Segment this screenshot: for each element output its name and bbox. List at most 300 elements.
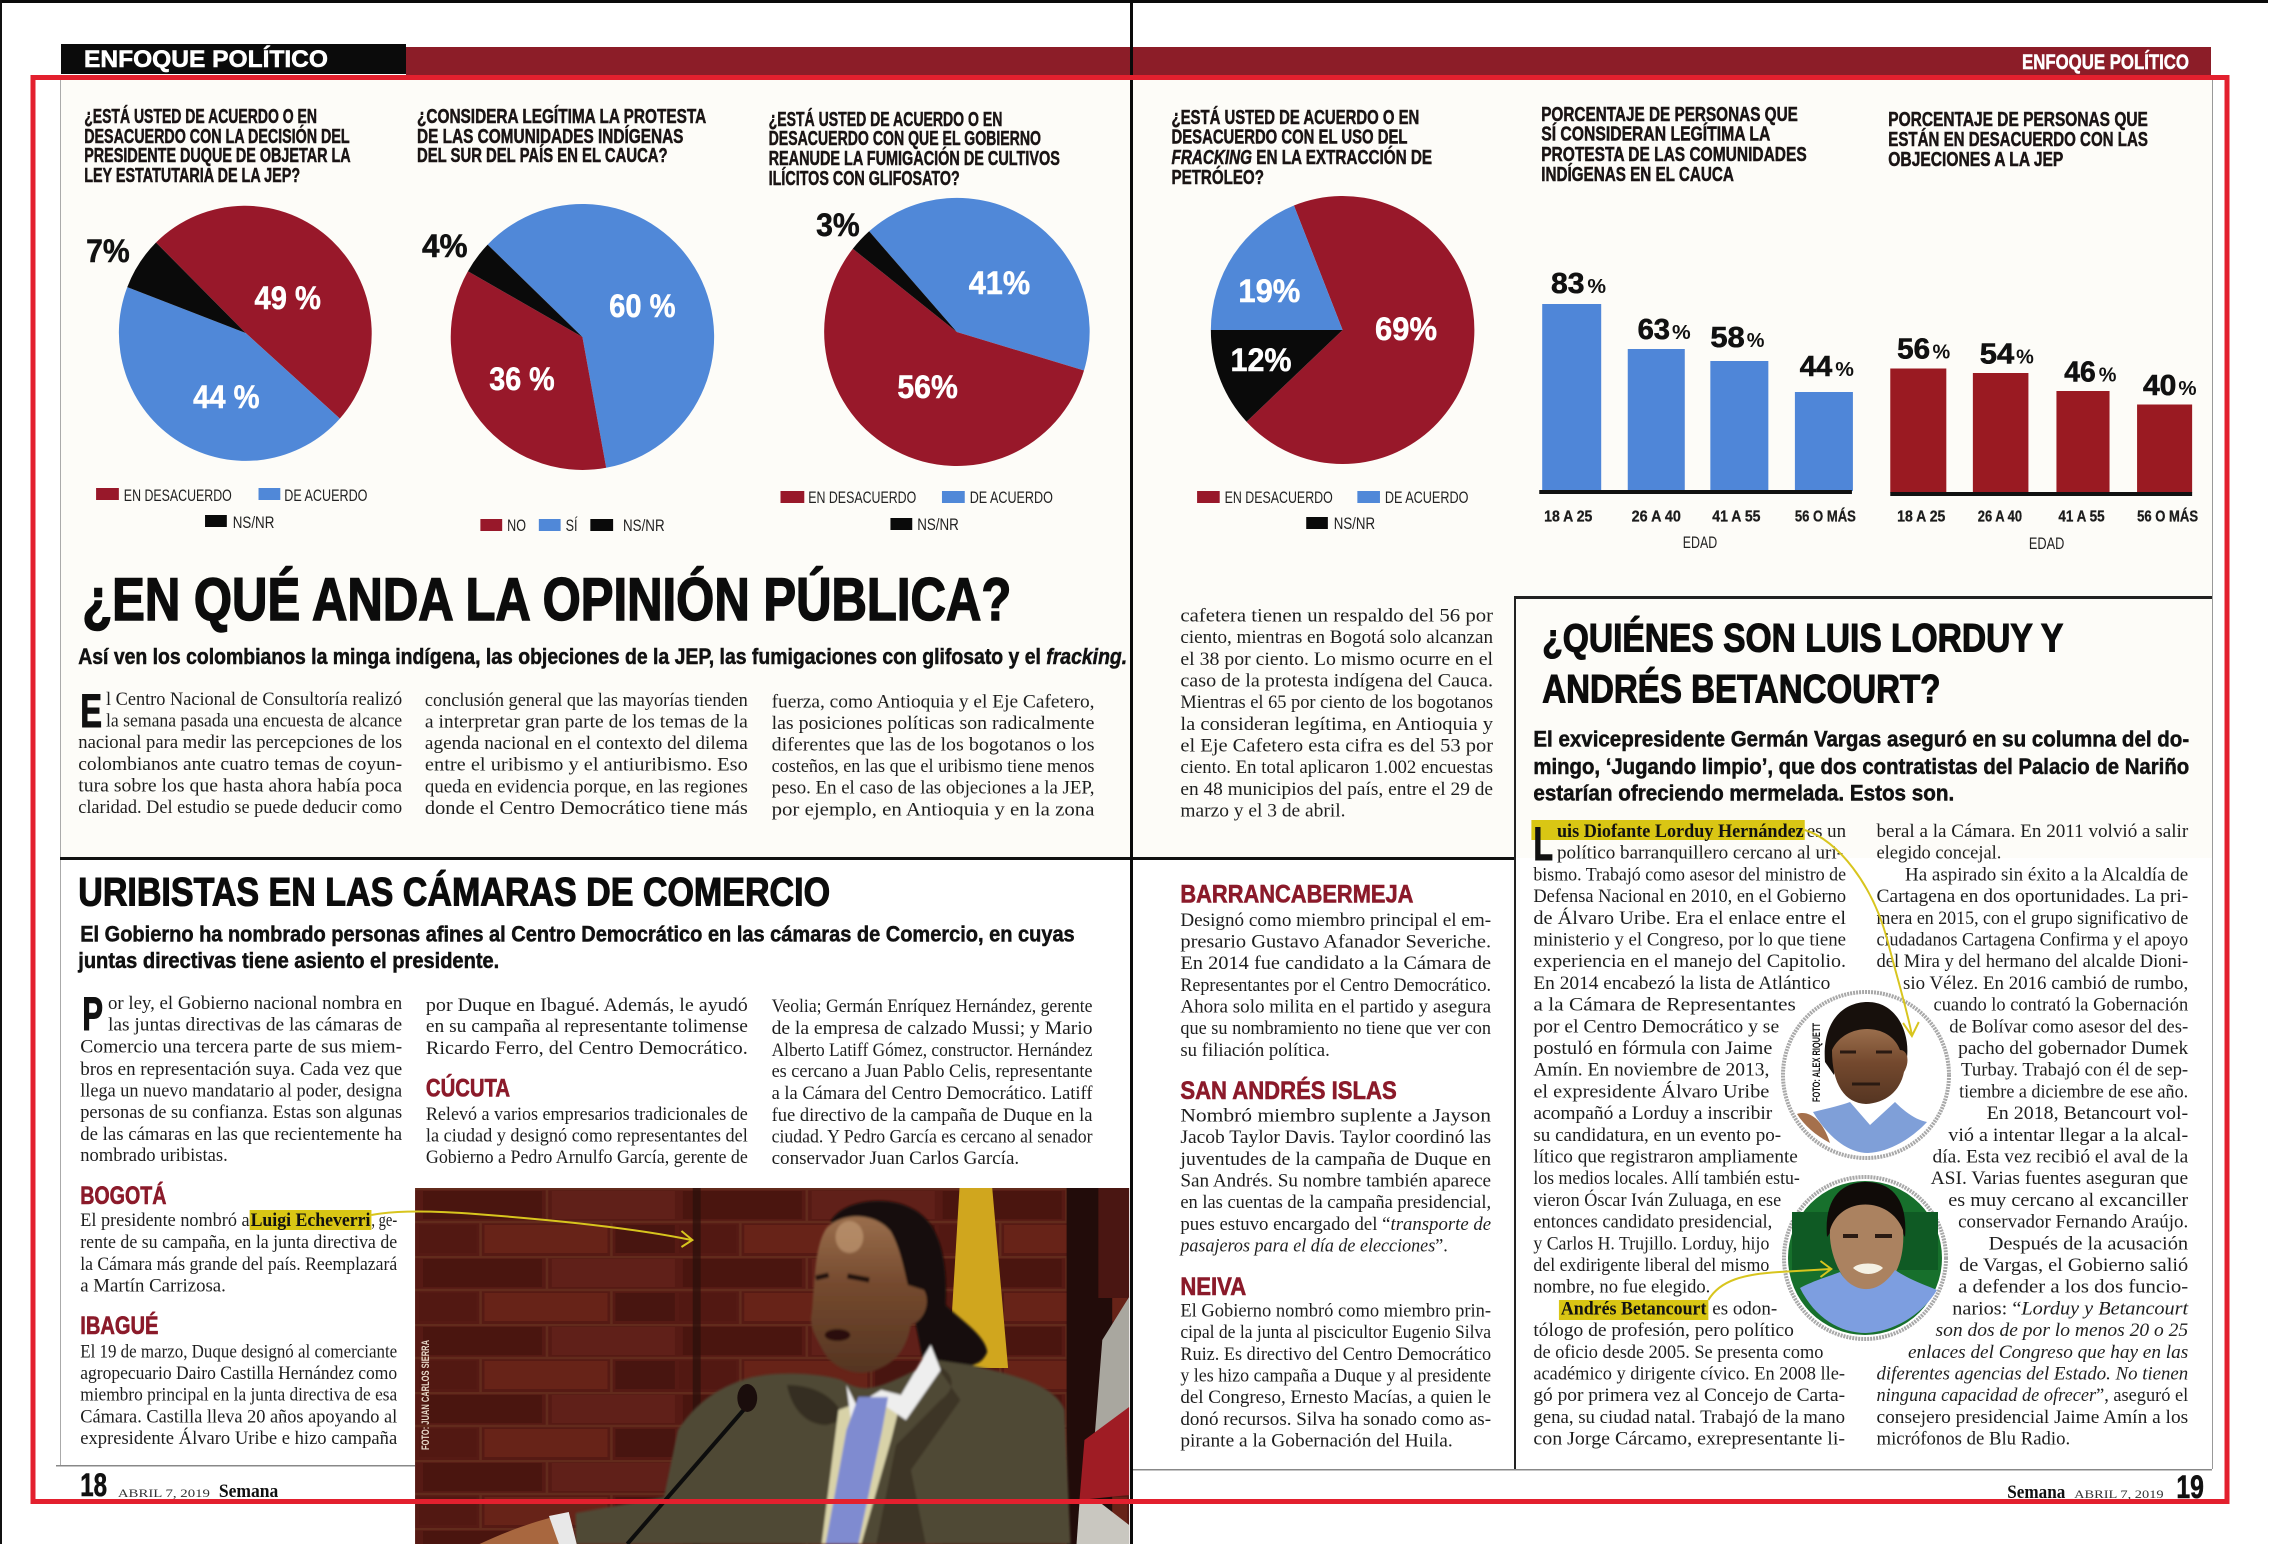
footer: page 19: Semana bbox=[2007, 1482, 2066, 1503]
text block: Betancourt profile column: de Vargas, el Gobierno salió bbox=[1959, 1255, 2188, 1276]
section: Bogotá: El presidente nombró a bbox=[80, 1210, 250, 1231]
text block: opinion article column 3 bbox=[772, 691, 1095, 821]
title: who are Lorduy and Betancourt bbox=[1542, 616, 2063, 712]
text block: Lorduy profile column: del exdirigente liberal del mismo bbox=[1533, 1255, 1769, 1276]
text block: Lorduy profile column: Amín. En noviembre de 2013, bbox=[1533, 1060, 1769, 1081]
section: San Andrés Islas: en las cuentas de la campaña presidencial, bbox=[1180, 1192, 1491, 1213]
text block: Betancourt profile column: enlaces del Congreso que hay en las bbox=[1908, 1342, 2188, 1363]
legend: EN DESACUERDO bbox=[124, 486, 232, 505]
text block: Betancourt profile column: mera en 2015, con el grupo significativo de bbox=[1877, 908, 2188, 929]
legend: EN DESACUERDO bbox=[808, 488, 916, 507]
legend: DE ACUERDO bbox=[970, 488, 1053, 507]
section: Neiva bbox=[1180, 1274, 1492, 1452]
text block: Lorduy profile column: político barranquillero cercano al uri- bbox=[1557, 843, 1843, 864]
pie: 3% bbox=[816, 207, 860, 243]
age axis: 26 A 40 bbox=[1978, 508, 2022, 526]
section: Neiva: El Gobierno nombró como miembro prin- bbox=[1180, 1301, 1491, 1322]
question text: DESACUERDO CON EL USO DEL bbox=[1172, 126, 1407, 149]
legend: DE ACUERDO bbox=[1385, 488, 1468, 507]
panel: pie chart JEP decision bbox=[84, 105, 372, 532]
text block: chambers article column 3: fue directivo de la campaña de Duque en la bbox=[772, 1105, 1093, 1126]
text block: Betancourt profile column: día. Esta vez recibió el aval de la bbox=[1933, 1146, 2189, 1168]
section: Barrancabermeja: Ahora solo milita en el partido y asegura bbox=[1180, 997, 1492, 1018]
text block: opinion article column 3: fuerza, como Antioquia y el Eje Cafetero, bbox=[772, 691, 1095, 713]
text block: chambers article column 3: es cercano a Juan Pablo Celis, representante bbox=[772, 1061, 1093, 1082]
age axis: 56 O MÁS bbox=[2137, 506, 2198, 526]
section: Neiva: cipal de la junta al piscicultor Eugenio Silva bbox=[1180, 1322, 1492, 1343]
text block: chambers article intro bbox=[80, 988, 403, 1166]
text block: opinion article column 2: conclusión general que las mayorías tienden bbox=[425, 690, 748, 711]
section: Ibagué: expresidente Álvaro Uribe e hizo campaña bbox=[80, 1427, 398, 1449]
question text bbox=[84, 105, 351, 187]
text block: opinion article column 3: las posiciones políticas son radicalmente bbox=[772, 713, 1095, 734]
section: Bogotá: rente de su campaña, en la junta directiva de bbox=[80, 1232, 397, 1253]
age axis: EDAD bbox=[2029, 534, 2064, 553]
title: main headline: ¿EN QUÉ ANDA LA OPINIÓN PÚBLICA? bbox=[82, 566, 1011, 633]
section: Ibagué: agropecuario Dairo Castilla Hernández como bbox=[80, 1363, 397, 1384]
question text: OBJECIONES A LA JEP bbox=[1888, 149, 2063, 171]
portrait: Luis Lorduy bbox=[1783, 992, 1949, 1158]
text block: Lorduy profile column: nombre, no fue elegido. bbox=[1533, 1277, 1710, 1298]
panel: bar chart JEP objections by age bbox=[1888, 109, 2198, 553]
question text: PORCENTAJE DE PERSONAS QUE bbox=[1888, 109, 2148, 131]
subtitle: Lorduy and Betancourt deck: El exvicepresidente Germán Vargas aseguró en su columna del do- bbox=[1533, 727, 2189, 752]
text block: Lorduy profile column: tólogo de profesión, pero político bbox=[1533, 1320, 1794, 1341]
text block: Betancourt profile column: cuando lo contrató la Gobernación bbox=[1934, 994, 2189, 1016]
panel: bar chart protest by age bbox=[1539, 104, 1856, 552]
text block: chambers article column 2 top: en su campaña al representante tolimense bbox=[426, 1016, 748, 1037]
section: Neiva: NEIVA bbox=[1180, 1274, 1246, 1301]
legend: EN DESACUERDO bbox=[1225, 488, 1333, 507]
text block: chambers article intro: P bbox=[82, 988, 103, 1040]
pie: 4% bbox=[422, 228, 468, 264]
question text: LEY ESTATUTARIA DE LA JEP? bbox=[84, 165, 300, 187]
title: who are Lorduy and Betancourt: ¿QUIÉNES SON LUIS LORDUY Y bbox=[1542, 616, 2063, 661]
text block: Lorduy profile column: gena, su ciudad natal. Trabajó de la mano bbox=[1533, 1407, 1845, 1428]
legend: NS/NR bbox=[233, 513, 274, 532]
text block: opinion article column 1: tura sobre los que hasta ahora había poca bbox=[78, 776, 403, 797]
age axis: 26 A 40 bbox=[1632, 508, 1681, 526]
question text: SÍ CONSIDERAN LEGÍTIMA LA bbox=[1541, 122, 1770, 146]
text block: opinion article column 3: costeños, en las que el uribismo tiene menos bbox=[772, 756, 1095, 777]
section: San Andrés Islas bbox=[1178, 1077, 1492, 1257]
section: Ibagué: El 19 de marzo, Duque designó al comerciante bbox=[80, 1342, 397, 1363]
bars bbox=[1890, 368, 2192, 496]
text block: opinion article column 1: la semana pasada una encuesta de alcance bbox=[106, 711, 402, 732]
text block: Betancourt profile column: del Mira y del hermano del alcalde Dioni- bbox=[1877, 951, 2188, 972]
bar values: % bbox=[2099, 364, 2117, 387]
footer: page 19: ABRIL 7, 2019 bbox=[2074, 1487, 2164, 1501]
legend bbox=[1197, 488, 1468, 533]
bar values: 54 bbox=[1980, 338, 2014, 371]
pie: 19% bbox=[1238, 273, 1300, 309]
text block: opinion article column 1: claridad. Del estudio se puede deducir como bbox=[78, 797, 402, 818]
title: who are Lorduy and Betancourt: ANDRÉS BETANCOURT? bbox=[1542, 667, 1940, 712]
text block: chambers article column 3: Veolia; Germán Enríquez Hernández, gerente bbox=[772, 996, 1093, 1017]
text block: Lorduy profile column: su candidatura, en un evento po- bbox=[1533, 1125, 1781, 1146]
text block: Betancourt profile column: consejero presidencial Jaime Amín a los bbox=[1877, 1407, 2188, 1428]
pie: 44 % bbox=[193, 379, 260, 415]
bar values: % bbox=[2178, 378, 2197, 400]
text block: chambers article column 3: de la empresa de calzado Mussi; y Mario bbox=[772, 1018, 1093, 1039]
text block: chambers article column 2 top: Ricardo Ferro, del Centro Democrático. bbox=[426, 1038, 748, 1059]
subtitle: chambers of commerce deck: juntas directivas tiene asiento el presidente. bbox=[77, 948, 499, 973]
arrow: Betancourt name to portrait bbox=[1708, 1261, 1831, 1300]
question text: ¿ESTÁ USTED DE ACUERDO O EN bbox=[769, 108, 1002, 131]
footer: page 18: Semana bbox=[219, 1481, 279, 1502]
bar values: % bbox=[1672, 322, 1691, 344]
question text: FRACKING EN LA EXTRACCIÓN DE bbox=[1172, 145, 1432, 169]
question text: PROTESTA DE LAS COMUNIDADES bbox=[1541, 144, 1807, 166]
question text: ESTÁN EN DESACUERDO CON LAS bbox=[1888, 128, 2148, 151]
question text bbox=[1888, 109, 2148, 171]
section: San Andrés Islas: juventudes de la campaña de Duque en bbox=[1179, 1149, 1492, 1170]
section: Bogotá: a Martín Carrizosa. bbox=[80, 1276, 226, 1297]
text block: Betancourt profile column: ciudadanos Cartagena Confirma y el apoyo bbox=[1877, 929, 2188, 951]
section: Ibagué bbox=[80, 1311, 398, 1449]
footer: page 18: 18 bbox=[80, 1467, 107, 1503]
highlight: Luigi Echeverri bbox=[250, 1210, 371, 1230]
text block: Betancourt profile column: de Bolívar como asesor del des- bbox=[1949, 1016, 2188, 1037]
center fold line bbox=[1130, 0, 1133, 1544]
text block: Betancourt profile column: En 2018, Betancourt vol- bbox=[1987, 1103, 2188, 1124]
text block: chambers article intro: personas de su confianza. Estas son algunas bbox=[80, 1102, 402, 1123]
photo: Luigi Echeverri speaking at microphone bbox=[415, 1188, 1129, 1544]
section: San Andrés Islas: Nombró miembro suplente a Jayson bbox=[1180, 1106, 1492, 1127]
text block: chambers article intro: or ley, el Gobierno nacional nombra en bbox=[108, 993, 403, 1014]
text block: opinion article column 4: ciento. En total aplicaron 1.002 encuestas bbox=[1180, 757, 1493, 778]
question text: DE LAS COMUNIDADES INDÍGENAS bbox=[417, 125, 683, 148]
text block: Betancourt profile column: vió a intentar llegar a la alcal- bbox=[1948, 1125, 2188, 1146]
pie: 60 % bbox=[609, 288, 676, 324]
bar values: % bbox=[1933, 341, 1951, 364]
section: Ibagué: miembro principal en la junta directiva de esa bbox=[80, 1385, 398, 1406]
section: Neiva: y les hizo campaña a Duque y al presidente bbox=[1180, 1366, 1491, 1387]
question text: REANUDE LA FUMIGACIÓN DE CULTIVOS bbox=[769, 146, 1060, 170]
text block: Lorduy profile column: académico y dirigente cívico. En 2008 lle- bbox=[1533, 1363, 1845, 1385]
text block: Lorduy profile column: Defensa Nacional en 2010, en el Gobierno bbox=[1533, 886, 1846, 907]
question text bbox=[1172, 106, 1432, 189]
question text: DESACUERDO CON QUE EL GOBIERNO bbox=[769, 128, 1041, 150]
portrait: Luis Lorduy: FOTO: ALEX RIQUETT bbox=[1811, 1023, 1823, 1102]
question text bbox=[417, 105, 706, 167]
text block: chambers article column 3: conservador Juan Carlos García. bbox=[772, 1148, 1019, 1169]
text block: Betancourt profile column: Turbay. Trabajó con él de sep- bbox=[1961, 1060, 2188, 1081]
panel: pie chart glyphosate bbox=[769, 108, 1090, 534]
highlight: Andrés Betancourt bbox=[1559, 1300, 1708, 1320]
section header bar: ENFOQUE POLÍTICO bbox=[84, 45, 328, 73]
text block: opinion article column 4 bbox=[1180, 606, 1494, 822]
text block: Betancourt profile column: pacho del gobernador Dumek bbox=[1958, 1038, 2189, 1059]
arrow: Luigi Echeverri to photo bbox=[371, 1212, 692, 1247]
subtitle: main deck: Así ven los colombianos la minga indígena, las objeciones de la JEP, las fumigaciones con glifosato y el fracking. bbox=[78, 644, 1127, 669]
bar values: 44 bbox=[1800, 351, 1832, 383]
question text: PETRÓLEO? bbox=[1172, 165, 1264, 189]
section: Ibagué: IBAGUÉ bbox=[80, 1311, 158, 1340]
text block: opinion article column 4: cafetera tienen un respaldo del 56 por bbox=[1180, 606, 1494, 627]
panel: pie chart fracking bbox=[1172, 106, 1474, 533]
text block: Lorduy profile column: acompañó a Lorduy a inscribir bbox=[1533, 1103, 1773, 1124]
text block: Lorduy profile column: uis Diofante Lorduy Hernández bbox=[1557, 821, 1804, 842]
question text: PORCENTAJE DE PERSONAS QUE bbox=[1541, 104, 1798, 126]
text block: Betancourt profile column: tiembre a diciembre de ese año. bbox=[1959, 1081, 2188, 1102]
text block: Lorduy profile column: postuló en fórmula con Jaime bbox=[1533, 1038, 1772, 1059]
section: Bogotá bbox=[80, 1181, 398, 1297]
text block: chambers article column 2 top: por Duque en Ibagué. Además, le ayudó bbox=[426, 995, 748, 1016]
text block: Betancourt profile column: Cartagena en dos oportunidades. La pri- bbox=[1877, 886, 2188, 907]
section: Neiva: Ruiz. Es directivo del Centro Democrático bbox=[1180, 1344, 1491, 1365]
age axis: 18 A 25 bbox=[1897, 508, 1945, 526]
pie bbox=[422, 204, 714, 470]
legend: SÍ bbox=[566, 516, 578, 535]
question text: DESACUERDO CON LA DECISIÓN DEL bbox=[84, 124, 350, 148]
footer: page 18: ABRIL 7, 2019 bbox=[118, 1486, 210, 1500]
legend bbox=[96, 486, 367, 532]
text block: Lorduy profile column: el expresidente Álvaro Uribe bbox=[1533, 1080, 1769, 1102]
age axis: 56 O MÁS bbox=[1795, 506, 1856, 526]
section header bar bbox=[61, 44, 2211, 75]
bar values: % bbox=[1747, 330, 1765, 352]
pie: 7% bbox=[86, 233, 130, 269]
question text: DEL SUR DEL PAÍS EN EL CAUCA? bbox=[417, 144, 668, 167]
text block: Lorduy profile column: entonces candidato presidencial, bbox=[1533, 1211, 1772, 1233]
text block: Betancourt profile column: es muy cercano al excanciller bbox=[1948, 1190, 2189, 1211]
arrow: Lorduy name to portrait bbox=[1805, 830, 1919, 1036]
text block: Betancourt profile column: conservador Fernando Araújo. bbox=[1958, 1211, 2188, 1233]
text block: opinion article column 4: marzo y el 3 de abril. bbox=[1180, 801, 1346, 822]
pie: 36 % bbox=[489, 361, 555, 397]
section: Bogotá: la Cámara más grande del país. Reemplazará bbox=[80, 1254, 398, 1275]
text block: opinion article column 3: diferentes que las de los bogotanos o los bbox=[772, 735, 1095, 756]
text block: opinion article column 2: queda en evidencia porque, en las regiones bbox=[425, 776, 748, 798]
section: San Andrés Islas: Jacob Taylor Davis. Taylor coordinó las bbox=[1180, 1127, 1491, 1148]
text block: opinion article column 4: el 38 por ciento. Lo mismo ocurre en el bbox=[1180, 649, 1493, 670]
text block: chambers article column 3: Alberto Latiff Gómez, constructor. Hernández bbox=[772, 1040, 1093, 1061]
text block: Betancourt profile column: narios: “ Lorduy y Betancourt bbox=[1952, 1298, 2189, 1319]
man bbox=[576, 1201, 1071, 1544]
subtitle: Lorduy and Betancourt deck: estarían ofreciendo mermelada. Estos son. bbox=[1533, 781, 1954, 806]
portrait: Andrés Betancourt bbox=[1784, 1177, 1946, 1339]
section: Bogotá: BOGOTÁ bbox=[80, 1181, 166, 1210]
pie bbox=[86, 206, 372, 461]
text block: Lorduy profile column: gó por primera vez al Concejo de Carta- bbox=[1533, 1385, 1845, 1406]
text block: Betancourt profile column: Después de la acusación bbox=[1989, 1233, 2189, 1254]
text block: opinion article column 2: a interpretar gran parte de los temas de la bbox=[425, 712, 748, 733]
text block: Betancourt profile column: elegido concejal. bbox=[1877, 843, 2001, 864]
text block: opinion article column 4: el Eje Cafetero esta cifra es del 53 por bbox=[1180, 736, 1494, 757]
photo credit: FOTO: JUAN CARLOS SIERRA bbox=[420, 1340, 432, 1450]
text block: Lorduy profile column: bismo. Trabajó como asesor del ministro de bbox=[1533, 864, 1846, 885]
highlight: Luis Diofante Lorduy Hernández bbox=[1531, 820, 1805, 840]
section header bar: ENFOQUE POLÍTICO bbox=[2022, 51, 2189, 74]
text block: Lorduy profile column: Andrés Betancourt bbox=[1561, 1298, 1707, 1319]
section: Cúcuta: Relevó a varios empresarios tradicionales de bbox=[426, 1104, 748, 1125]
text block: Lorduy profile column: es odon- bbox=[1712, 1298, 1777, 1319]
section: Cúcuta bbox=[426, 1073, 748, 1168]
pie bbox=[1211, 196, 1474, 464]
text block: Lorduy profile column: a la Cámara de Representantes bbox=[1533, 994, 1796, 1016]
text block: opinion article column 1: l Centro Nacional de Consultoría realizó bbox=[106, 689, 402, 710]
text block: opinion article column 3: peso. En el caso de las objeciones a la JEP, bbox=[772, 778, 1095, 799]
text block: Lorduy profile column: experiencia en el manejo del Capitolio. bbox=[1533, 951, 1846, 972]
text block: opinion article column 2: donde el Centro Democrático tiene más bbox=[425, 798, 748, 819]
bar values: % bbox=[2016, 346, 2034, 369]
text block: Lorduy profile column: es un bbox=[1807, 821, 1847, 842]
legend bbox=[781, 488, 1053, 534]
panel: pie chart indigenous protest bbox=[417, 105, 714, 535]
text block: Betancourt profile column: ASI. Varias fuentes aseguran que bbox=[1931, 1168, 2188, 1189]
text block: Betancourt profile column: son dos de por lo menos 20 o 25 bbox=[1936, 1320, 2188, 1341]
section: Cúcuta: Gobierno a Pedro Arnulfo García, gerente de bbox=[426, 1147, 748, 1168]
text block: chambers article column 3 bbox=[772, 996, 1093, 1169]
text block: chambers article intro: de las cámaras en las que recientemente ha bbox=[80, 1124, 403, 1145]
right page content bbox=[1172, 104, 2204, 1505]
text block: chambers article column 2 top bbox=[426, 995, 748, 1059]
footer: page 19: 19 bbox=[2176, 1469, 2204, 1505]
question text bbox=[1541, 104, 1807, 186]
title: chambers of commerce: URIBISTAS EN LAS CÁMARAS DE COMERCIO bbox=[78, 870, 830, 915]
pie: 56% bbox=[897, 369, 958, 405]
question text: ¿CONSIDERA LEGÍTIMA LA PROTESTA bbox=[417, 105, 706, 128]
text block: chambers article intro: bros en representación suya. Cada vez que bbox=[80, 1059, 402, 1080]
text block: Lorduy profile column: ministerio y el Congreso, por lo que tiene bbox=[1533, 929, 1846, 951]
legend: NS/NR bbox=[917, 515, 959, 534]
section: Neiva: donó recursos. Silva ha sonado como as- bbox=[1180, 1409, 1491, 1430]
text block: Lorduy profile column: L bbox=[1533, 818, 1553, 870]
bar values: 40 bbox=[2143, 370, 2176, 402]
bar values: % bbox=[1835, 359, 1854, 381]
text block: Betancourt profile column: Ha aspirado sin éxito a la Alcaldía de bbox=[1905, 864, 2188, 885]
section: Bogotá: , ge- bbox=[371, 1210, 397, 1231]
question text bbox=[769, 108, 1060, 190]
pie: 41% bbox=[969, 265, 1030, 301]
text block: opinion article column 1: E bbox=[80, 685, 102, 737]
section: Cúcuta: CÚCUTA bbox=[426, 1073, 510, 1103]
section: Cúcuta: la ciudad y designó como representantes del bbox=[426, 1126, 748, 1147]
section: Barrancabermeja: BARRANCABERMEJA bbox=[1180, 882, 1413, 909]
legend: NO bbox=[507, 516, 526, 535]
section: Bogotá: Luigi Echeverri bbox=[251, 1210, 370, 1231]
footer: page 18 bbox=[80, 1467, 279, 1503]
legend: NS/NR bbox=[623, 516, 665, 535]
age axis bbox=[1544, 506, 1856, 552]
bar values bbox=[1897, 333, 2197, 402]
question text: INDÍGENAS EN EL CAUCA bbox=[1541, 163, 1734, 186]
pie: 69% bbox=[1375, 311, 1437, 347]
age axis: 18 A 25 bbox=[1544, 508, 1593, 526]
text block: opinion article column 2: entre el uribismo y el antiuribismo. Eso bbox=[425, 755, 748, 776]
text block: opinion article column 4: Mientras el 65 por ciento de los bogotanos bbox=[1180, 692, 1493, 713]
bar values: 46 bbox=[2064, 356, 2096, 389]
text block: opinion article column 1 bbox=[78, 685, 403, 818]
section: Barrancabermeja: Designó como miembro principal el em- bbox=[1180, 910, 1491, 931]
text block: Betancourt profile column: a defender a los dos funcio- bbox=[1958, 1277, 2188, 1298]
text block: Betancourt profile column: sio Vélez. En 2016 cambió de rumbo, bbox=[1903, 973, 2188, 994]
section: San Andrés Islas: pasajeros para el día de elecciones”. bbox=[1178, 1236, 1448, 1257]
bar values: 58 bbox=[1710, 322, 1745, 354]
question text: ¿ESTÁ USTED DE ACUERDO O EN bbox=[84, 105, 317, 128]
age axis: 41 A 55 bbox=[1712, 508, 1761, 526]
bar values: 56 bbox=[1897, 333, 1930, 366]
text block: chambers article intro: nombrado uribistas. bbox=[80, 1145, 228, 1166]
subtitle: chambers of commerce deck: El Gobierno ha nombrado personas afines al Centro Democrático en las cámaras de Comercio, en cuyas bbox=[80, 922, 1075, 947]
age axis: EDAD bbox=[1683, 533, 1717, 552]
text block: Lorduy profile column: de oficio desde 2005. Se presenta como bbox=[1533, 1342, 1823, 1363]
subtitle: Lorduy and Betancourt deck bbox=[1533, 727, 2189, 806]
text block: Lorduy profile column: y Carlos H. Trujillo. Lorduy, hijo bbox=[1533, 1233, 1769, 1254]
text block: Lorduy profile column: los medios locales. Allí también estu- bbox=[1533, 1168, 1800, 1189]
section: Barrancabermeja: que su nombramiento no tiene que ver con bbox=[1180, 1018, 1492, 1039]
text block: opinion article column 4: la consideran legítima, en Antioquia y bbox=[1180, 714, 1494, 735]
text block: Lorduy profile column: vieron Óscar Iván Zuluaga, en ese bbox=[1533, 1189, 1781, 1211]
pie: 49 % bbox=[255, 280, 321, 316]
legend bbox=[480, 516, 665, 535]
text block: chambers article intro: las juntas directivas de las cámaras de bbox=[108, 1015, 402, 1036]
legend: NS/NR bbox=[1334, 514, 1375, 533]
text block: Betancourt profile column: micrófonos de Blu Radio. bbox=[1877, 1428, 2070, 1450]
text block: opinion article column 2 bbox=[425, 690, 748, 819]
section: San Andrés Islas: pues estuvo encargado del “transporte de bbox=[1180, 1214, 1491, 1235]
text block: chambers article intro: llega un nuevo mandatario al poder, designa bbox=[80, 1081, 403, 1102]
text block: chambers article column 3: ciudad. Y Pedro García es cercano al senador bbox=[772, 1127, 1093, 1148]
age axis bbox=[1897, 506, 2198, 553]
question text: ILÍCITOS CON GLIFOSATO? bbox=[769, 167, 960, 190]
text block: opinion article column 2: agenda nacional en el contexto del dilema bbox=[425, 733, 748, 754]
question text: ¿ESTÁ USTED DE ACUERDO O EN bbox=[1172, 106, 1419, 129]
subtitle: chambers of commerce deck bbox=[77, 922, 1075, 973]
text block: Betancourt profile column: beral a la Cámara. En 2011 volvió a salir bbox=[1877, 821, 2189, 842]
subtitle: Lorduy and Betancourt deck: mingo, ‘Jugando limpio’, que dos contratistas del Palacio de Nariño bbox=[1533, 754, 2189, 779]
section: Barrancabermeja: Representantes por el Centro Democrático. bbox=[1180, 975, 1491, 996]
text block: chambers article intro: Comercio una tercera parte de sus miem- bbox=[80, 1037, 402, 1058]
bar values bbox=[1551, 268, 1854, 383]
question text: PRESIDENTE DUQUE DE OBJETAR LA bbox=[84, 145, 351, 167]
text block: Lorduy profile column: de Álvaro Uribe. Era el enlace entre el bbox=[1533, 907, 1846, 929]
text block: opinion article column 3: por ejemplo, en Antioquia y en la zona bbox=[772, 799, 1095, 821]
age axis: 41 A 55 bbox=[2058, 508, 2105, 526]
section: Barrancabermeja: En 2014 fue candidato a la Cámara de bbox=[1180, 953, 1491, 974]
pie bbox=[816, 198, 1090, 466]
section: Barrancabermeja: presario Gustavo Afanador Severiche. bbox=[1180, 932, 1491, 953]
section: Barrancabermeja: su filiación política. bbox=[1180, 1040, 1330, 1061]
text block: Lorduy profile column bbox=[1531, 818, 1847, 1450]
section: Neiva: pirante a la Gobernación del Huila. bbox=[1180, 1431, 1453, 1452]
section: Ibagué: Cámara. Castilla lleva 20 años apoyando al bbox=[80, 1407, 397, 1428]
legend: DE ACUERDO bbox=[284, 486, 367, 505]
bar values: 83 bbox=[1551, 268, 1584, 300]
text block: Betancourt profile column: ninguna capacidad de ofrecer”, aseguró el bbox=[1877, 1385, 2188, 1406]
text block: opinion article column 4: caso de la protesta indígena del Cauca. bbox=[1180, 671, 1493, 692]
text block: Lorduy profile column: En 2014 encabezó la lista de Atlántico bbox=[1533, 973, 1830, 994]
text block: opinion article column 1: nacional para medir las percepciones de los bbox=[78, 732, 402, 753]
section: Neiva: del Congreso, Ernesto Macías, a quien le bbox=[1180, 1387, 1491, 1408]
section: Barrancabermeja bbox=[1180, 882, 1492, 1061]
text block: opinion article column 4: ciento, mientras en Bogotá solo alcanzan bbox=[1180, 627, 1494, 648]
text block: Lorduy profile column: lítico que registraron ampliamente bbox=[1533, 1146, 1798, 1168]
text block: Betancourt profile column bbox=[1877, 821, 2189, 1450]
text block: chambers article column 3: a la Cámara del Centro Democrático. Latiff bbox=[772, 1083, 1093, 1104]
left page content bbox=[77, 105, 1127, 1503]
text block: Lorduy profile column: con Jorge Cárcamo, exrepresentante li- bbox=[1533, 1428, 1845, 1450]
footer: page 19 bbox=[2007, 1469, 2204, 1505]
text block: Lorduy profile column: por el Centro Democrático y se bbox=[1533, 1016, 1779, 1037]
section: San Andrés Islas: SAN ANDRÉS ISLAS bbox=[1180, 1077, 1397, 1105]
text block: opinion article column 1: colombianos ante cuatro temas de coyun- bbox=[78, 754, 402, 775]
text block: opinion article column 4: en 48 municipios del país, entre el 29 de bbox=[1180, 779, 1493, 800]
text block: Betancourt profile column: diferentes agencias del Estado. No tienen bbox=[1877, 1363, 2188, 1385]
pie: 12% bbox=[1231, 342, 1291, 378]
bars bbox=[1539, 304, 1853, 494]
